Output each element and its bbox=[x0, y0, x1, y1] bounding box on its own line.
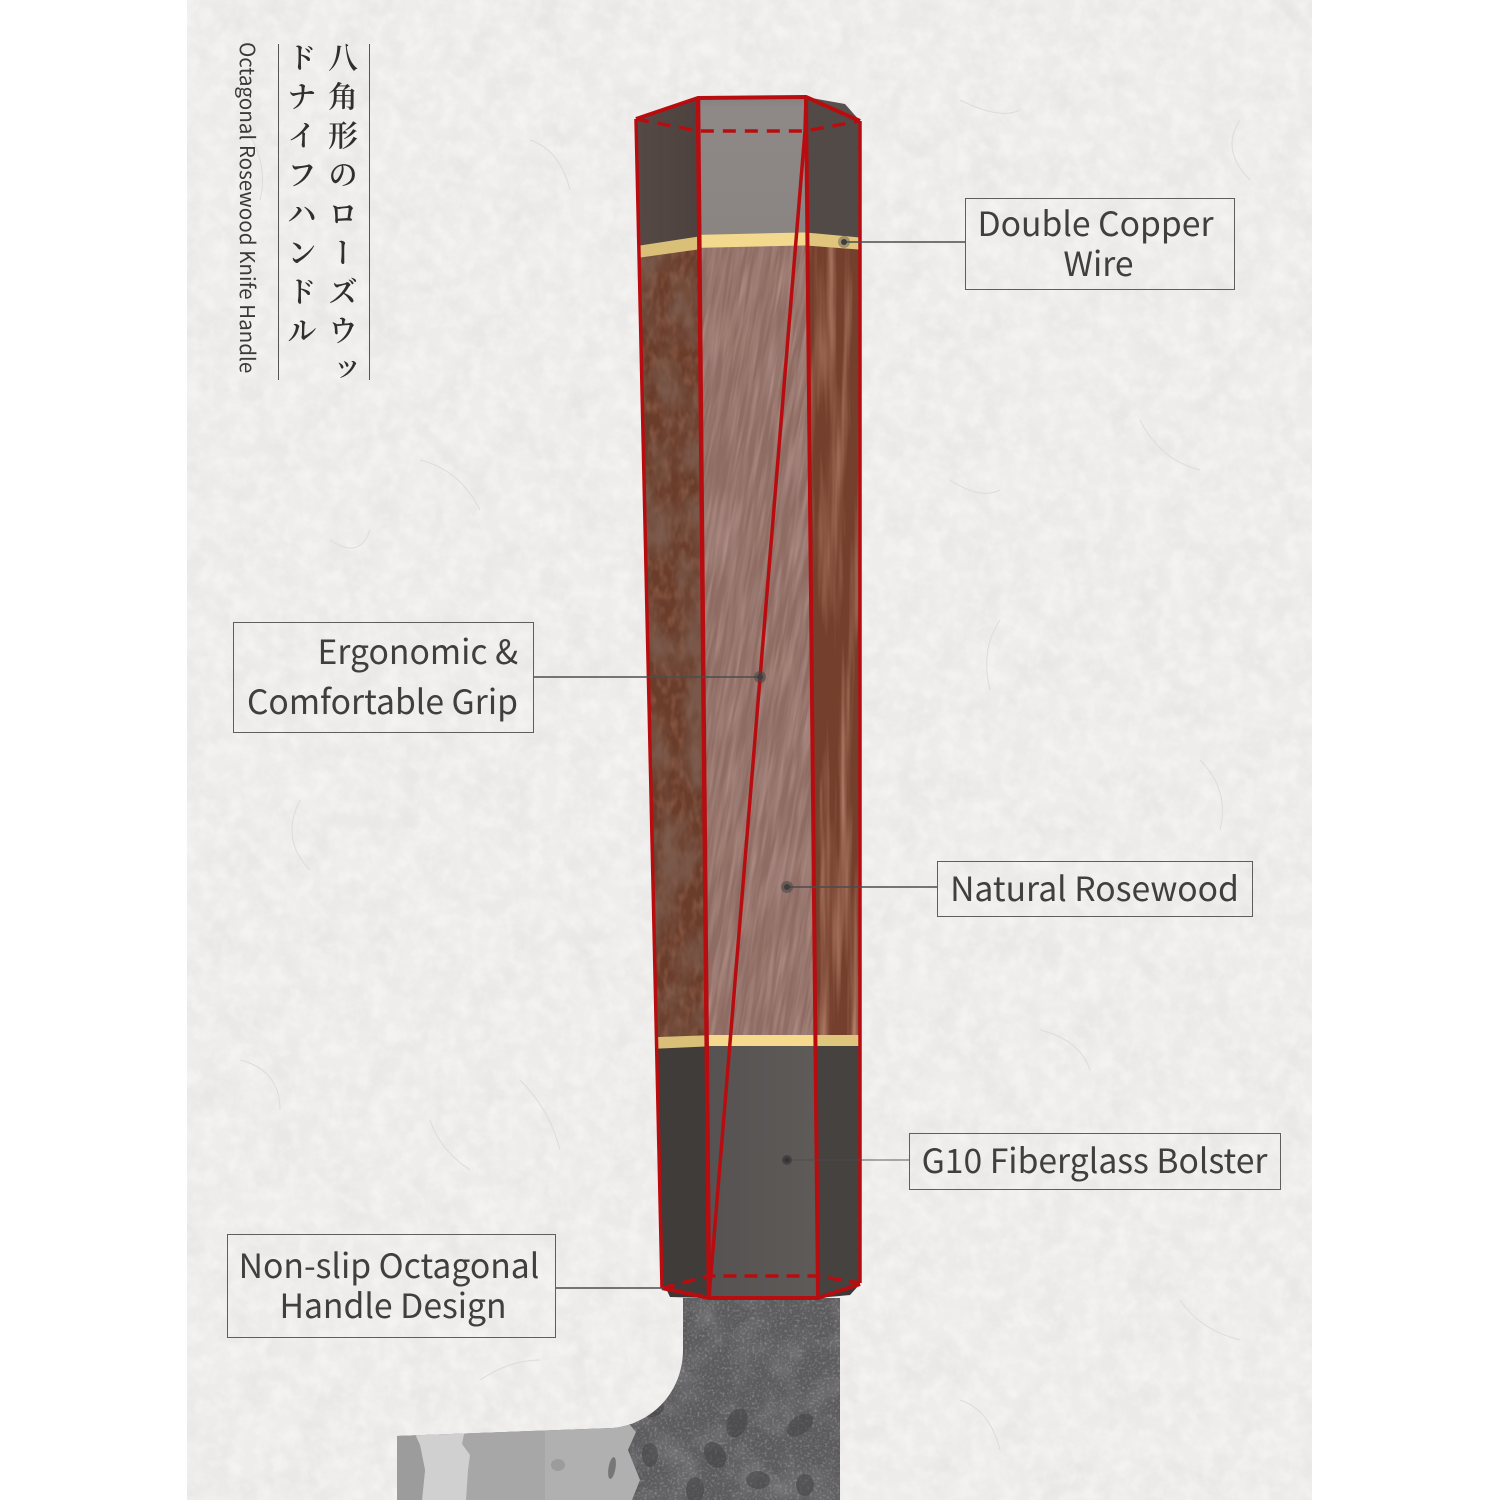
callout: Non-slip Octagonal Handle Design: Handle Design bbox=[279, 1279, 507, 1328]
subtitle: English vertical heading: Octagonal Rosewood Knife Handle bbox=[234, 42, 264, 373]
knife blade bbox=[380, 1290, 850, 1500]
red octagon wireframe bbox=[636, 97, 860, 1298]
callout: Ergonomic & Comfortable Grip bbox=[233, 622, 534, 733]
callout: Double Copper Wire bbox=[965, 198, 1235, 290]
callout: Double Copper Wire: Wire bbox=[1063, 237, 1134, 286]
callout: Natural Rosewood: Natural Rosewood bbox=[950, 862, 1239, 911]
left face bbox=[638, 101, 707, 1286]
blade light zones bbox=[474, 1425, 640, 1500]
callout: Ergonomic & Comfortable Grip: Ergonomic & bbox=[317, 625, 518, 674]
handle end caps bbox=[636, 97, 860, 140]
hammer dimples bbox=[551, 1400, 817, 1500]
knife handle bbox=[634, 95, 862, 1300]
callout: G10 Fiberglass Bolster: G10 Fiberglass Bolster bbox=[922, 1134, 1267, 1183]
callout: Ergonomic & Comfortable Grip: Comfortable Grip bbox=[247, 675, 518, 724]
paper background panel bbox=[187, 0, 1312, 1500]
leader lines and marker dots bbox=[533, 236, 965, 1288]
right face bbox=[808, 140, 858, 1295]
callout: Non-slip Octagonal Handle Design bbox=[227, 1234, 556, 1338]
title: Japanese vertical heading: 八角形のローズウッ ドナイフハンドル bbox=[280, 42, 365, 393]
callout: Double Copper Wire: Double Copper bbox=[977, 197, 1214, 246]
callout: Non-slip Octagonal Handle Design: Non-slip Octagonal bbox=[239, 1239, 539, 1288]
center face bbox=[700, 99, 816, 1296]
background and knife illustration bbox=[187, 0, 1312, 1500]
